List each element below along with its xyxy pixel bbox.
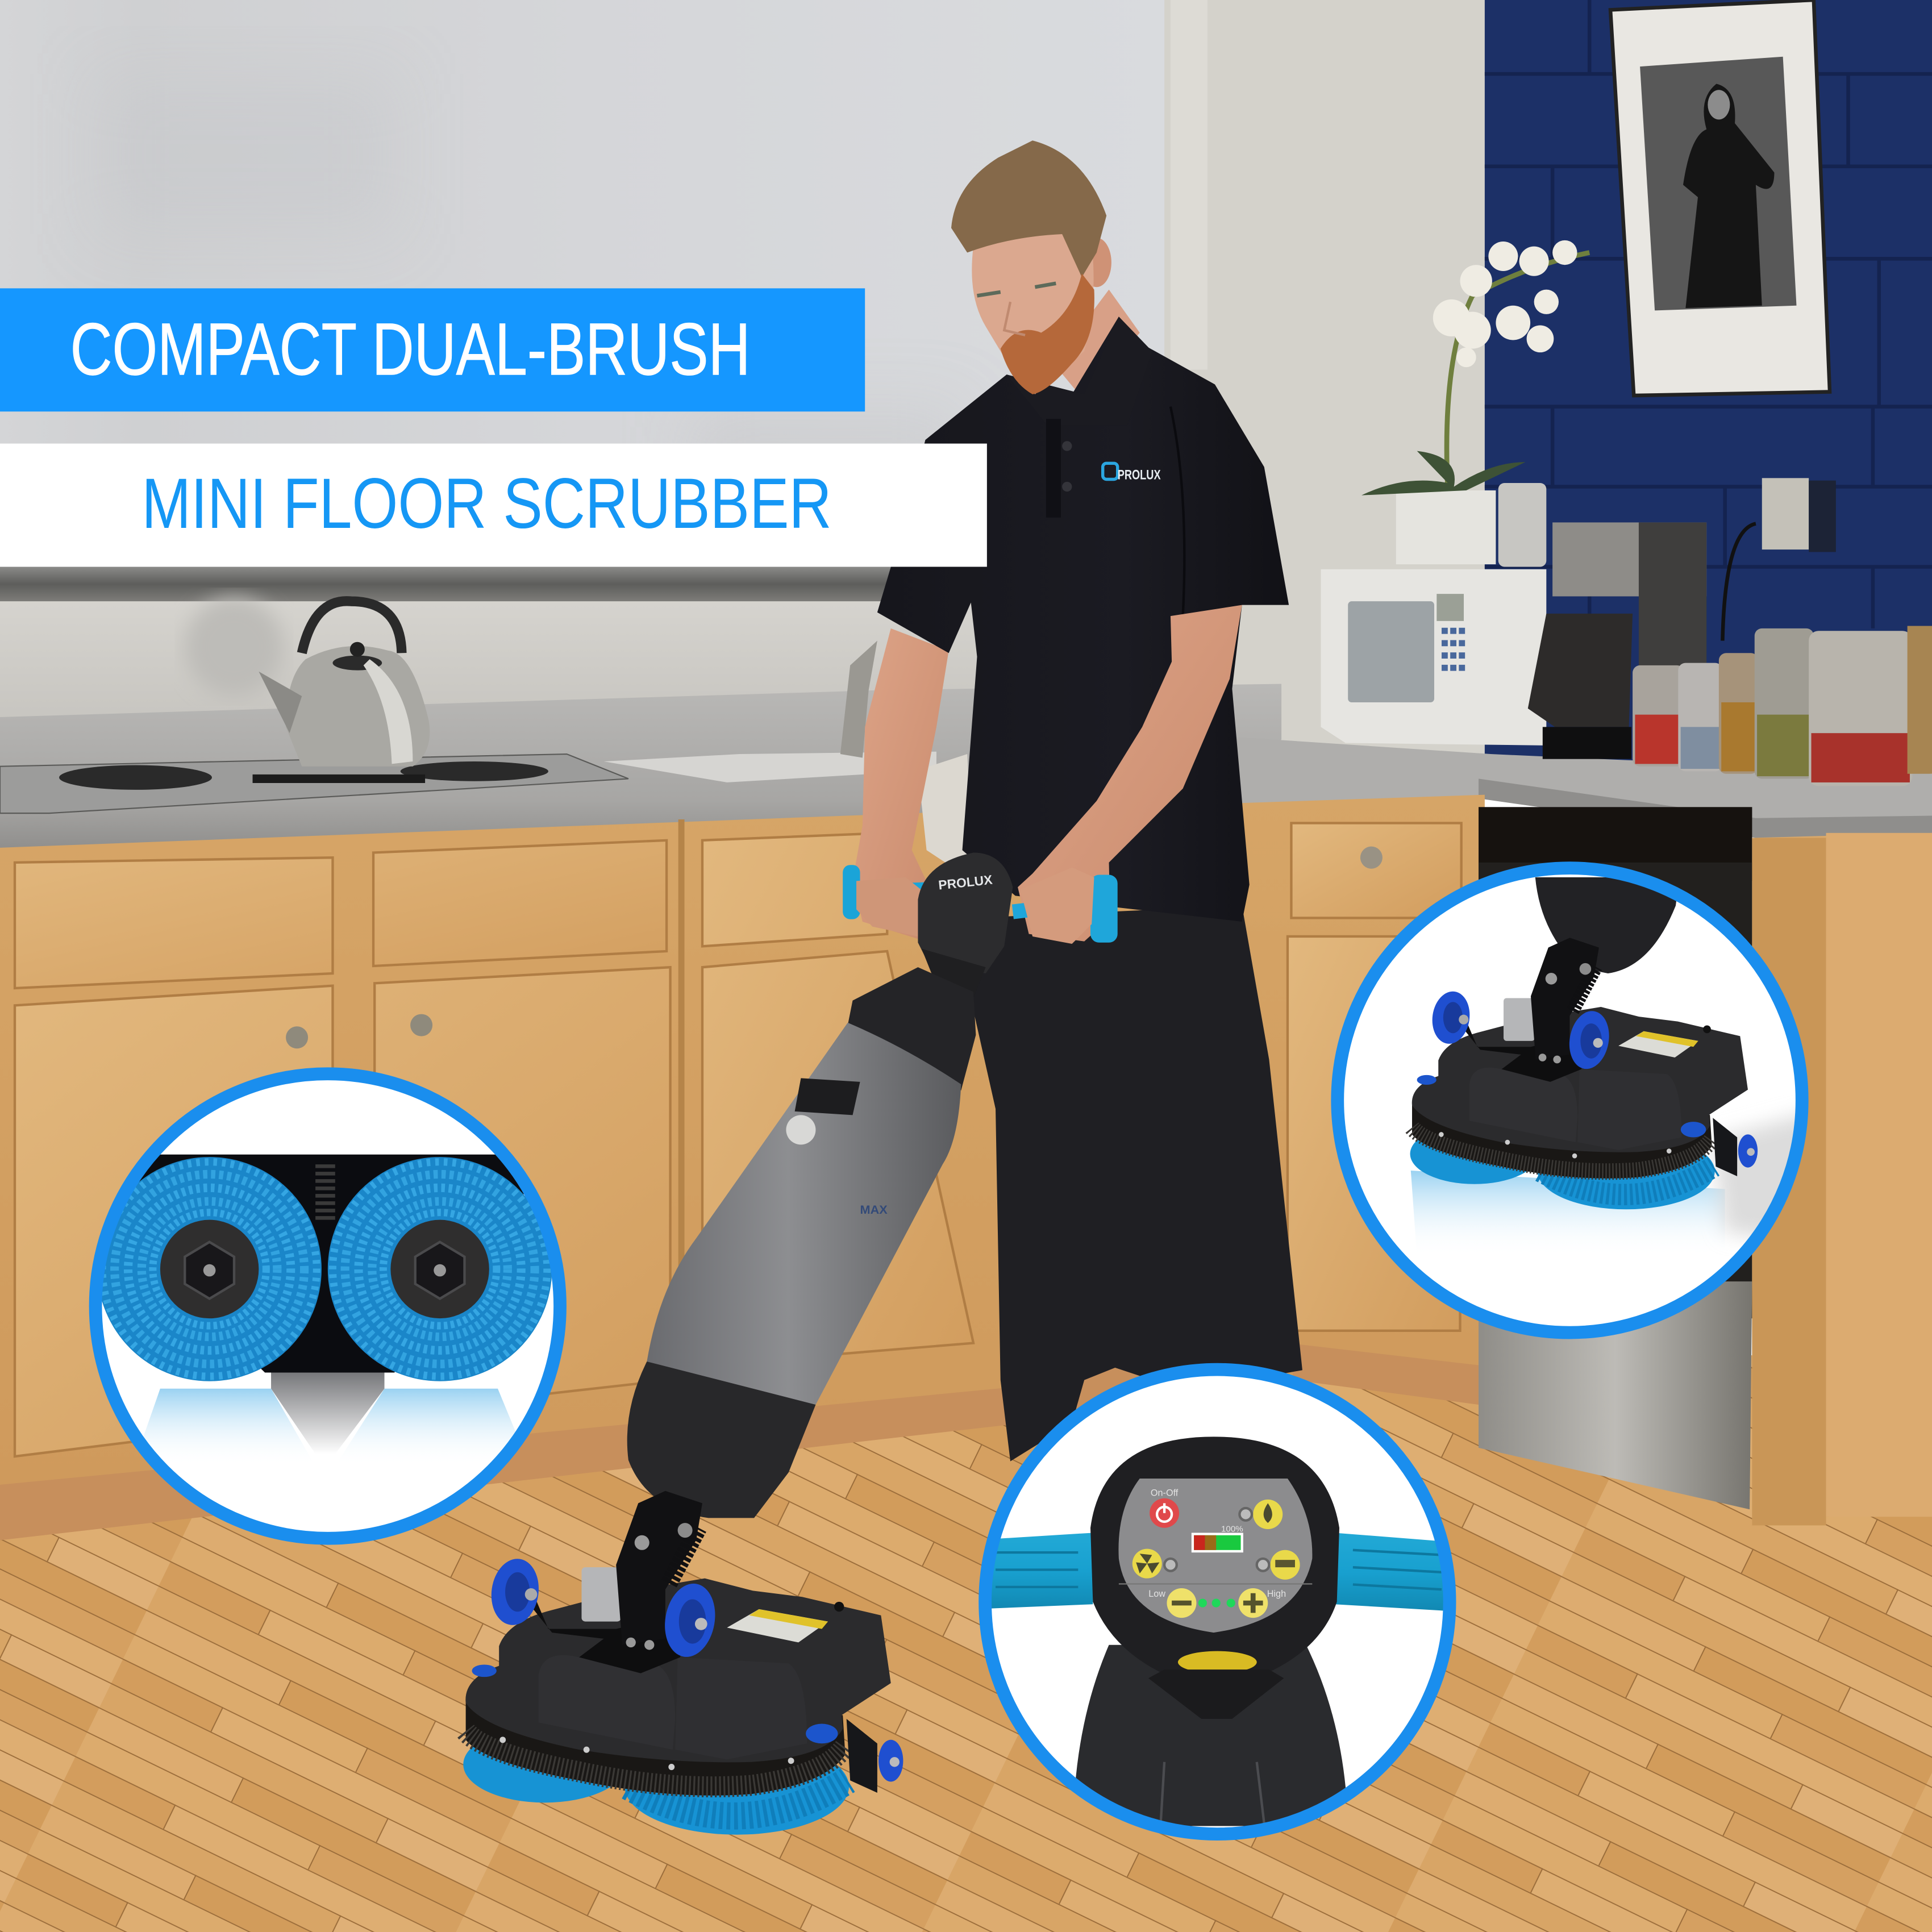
neck: [1054, 290, 1140, 401]
outlet and cords: [1722, 478, 1836, 641]
floor scrubber machine: [463, 853, 1118, 1835]
end cabinet: [1752, 833, 1932, 1525]
range hood strip: [0, 567, 900, 601]
left arm: [853, 628, 949, 939]
toe kick left: [0, 1343, 1238, 1540]
sink and faucet: [603, 641, 936, 782]
control panel plate: [1118, 1479, 1312, 1633]
coffee maker: [1528, 522, 1706, 759]
counter right: [1232, 737, 1932, 838]
backsplash: [0, 579, 1171, 721]
shirt logo: [1103, 463, 1161, 482]
callout ring: [95, 1074, 560, 1538]
title banner: white: [0, 444, 987, 567]
power button: [1150, 1498, 1179, 1528]
brush button: [1257, 1550, 1300, 1580]
floor shade on right: [1708, 1110, 1795, 1242]
callout background: [986, 1370, 1449, 1834]
handle head with brand: PROLUX: [938, 872, 993, 893]
polo shirt: [877, 317, 1289, 922]
tank handle slot: [795, 1078, 860, 1115]
wall: cream middle section: [1164, 0, 1491, 789]
circle callout: control panel: [973, 1369, 1460, 1834]
shirt logo: PROLUX: [1118, 467, 1161, 482]
on-off label: On-Off: [1151, 1488, 1179, 1498]
left grip: [973, 1533, 1093, 1609]
circle callout: base unit view: [1338, 868, 1823, 1333]
center spring: [320, 1164, 330, 1220]
machine underside: [136, 1155, 524, 1373]
counter left: [0, 684, 1281, 850]
stove top: [0, 754, 628, 813]
100% label: 100%: [1221, 1524, 1243, 1534]
microwave: [1321, 569, 1546, 746]
wall: cream corner strip: [1171, 0, 1208, 370]
minus button: [1167, 1588, 1196, 1618]
model label: MAX: [860, 1202, 888, 1217]
battery gauge: [1192, 1533, 1243, 1552]
orchid in white pot: [1361, 240, 1589, 567]
handle head with brand: [918, 853, 1013, 998]
water button: [1239, 1500, 1283, 1529]
callout ring: [1338, 868, 1802, 1333]
jars on counter: [1633, 626, 1932, 786]
callout ring: [985, 1369, 1450, 1834]
upper black collar: [848, 967, 976, 1090]
neck joint: [1148, 1669, 1284, 1719]
black dome: [1535, 877, 1679, 973]
title banner: blue: [0, 288, 865, 411]
title line one: COMPACT DUAL-BRUSH: [70, 307, 751, 390]
enlarged base unit: [1410, 938, 1758, 1209]
plus button: [1238, 1588, 1268, 1618]
right grip: [1334, 1533, 1460, 1612]
high label: High: [1267, 1589, 1286, 1599]
circle callout: dual brushes: [95, 1074, 560, 1538]
wall: dark blue painted brick: [1485, 0, 1932, 770]
brush reflections: [143, 1389, 515, 1444]
fan button: [1132, 1549, 1177, 1579]
speed leds: [1198, 1598, 1235, 1608]
kettle shadow on wall: [185, 598, 284, 696]
wall: soft shadow areas: [98, 74, 961, 555]
counter right front edge: [1479, 778, 1932, 838]
title line two: MINI FLOOR SCRUBBER: [141, 463, 832, 543]
floor: [0, 1355, 1932, 1932]
base unit with brushes and wheels: [463, 1491, 903, 1835]
low label: Low: [1148, 1589, 1165, 1599]
beard: [1001, 273, 1094, 394]
mini fridge: [1479, 807, 1752, 1509]
wall: grey left section: [0, 0, 1171, 579]
left brush: [97, 1157, 322, 1381]
right brush: [328, 1157, 552, 1381]
grey tank body: [647, 1023, 961, 1405]
lower body: [1073, 1645, 1348, 1826]
framed photo on wall: [1610, 0, 1830, 395]
cream towel: [918, 754, 973, 881]
eyes and nose: [977, 284, 1056, 295]
tank white button: [786, 1115, 815, 1144]
face: [972, 203, 1094, 394]
lower black housing: [627, 1361, 815, 1518]
ear: [1082, 238, 1111, 287]
floor reflection: [1410, 1171, 1725, 1232]
right arm: [1018, 605, 1242, 942]
hair: [951, 140, 1106, 277]
handle grips: [843, 865, 1118, 943]
yellow warning sticker: [1178, 1651, 1257, 1673]
callout background: [1338, 869, 1801, 1332]
man operating the scrubber: [853, 140, 1302, 1462]
kettle: [259, 601, 430, 767]
head: [951, 140, 1111, 394]
hands over grips: [856, 868, 1094, 944]
callout background: [96, 1075, 559, 1538]
floor shadow: [271, 1373, 385, 1454]
cabinets right: [1232, 795, 1485, 1405]
trousers: [973, 906, 1302, 1462]
cabinets left: [0, 801, 1238, 1491]
control head: [1090, 1436, 1339, 1682]
